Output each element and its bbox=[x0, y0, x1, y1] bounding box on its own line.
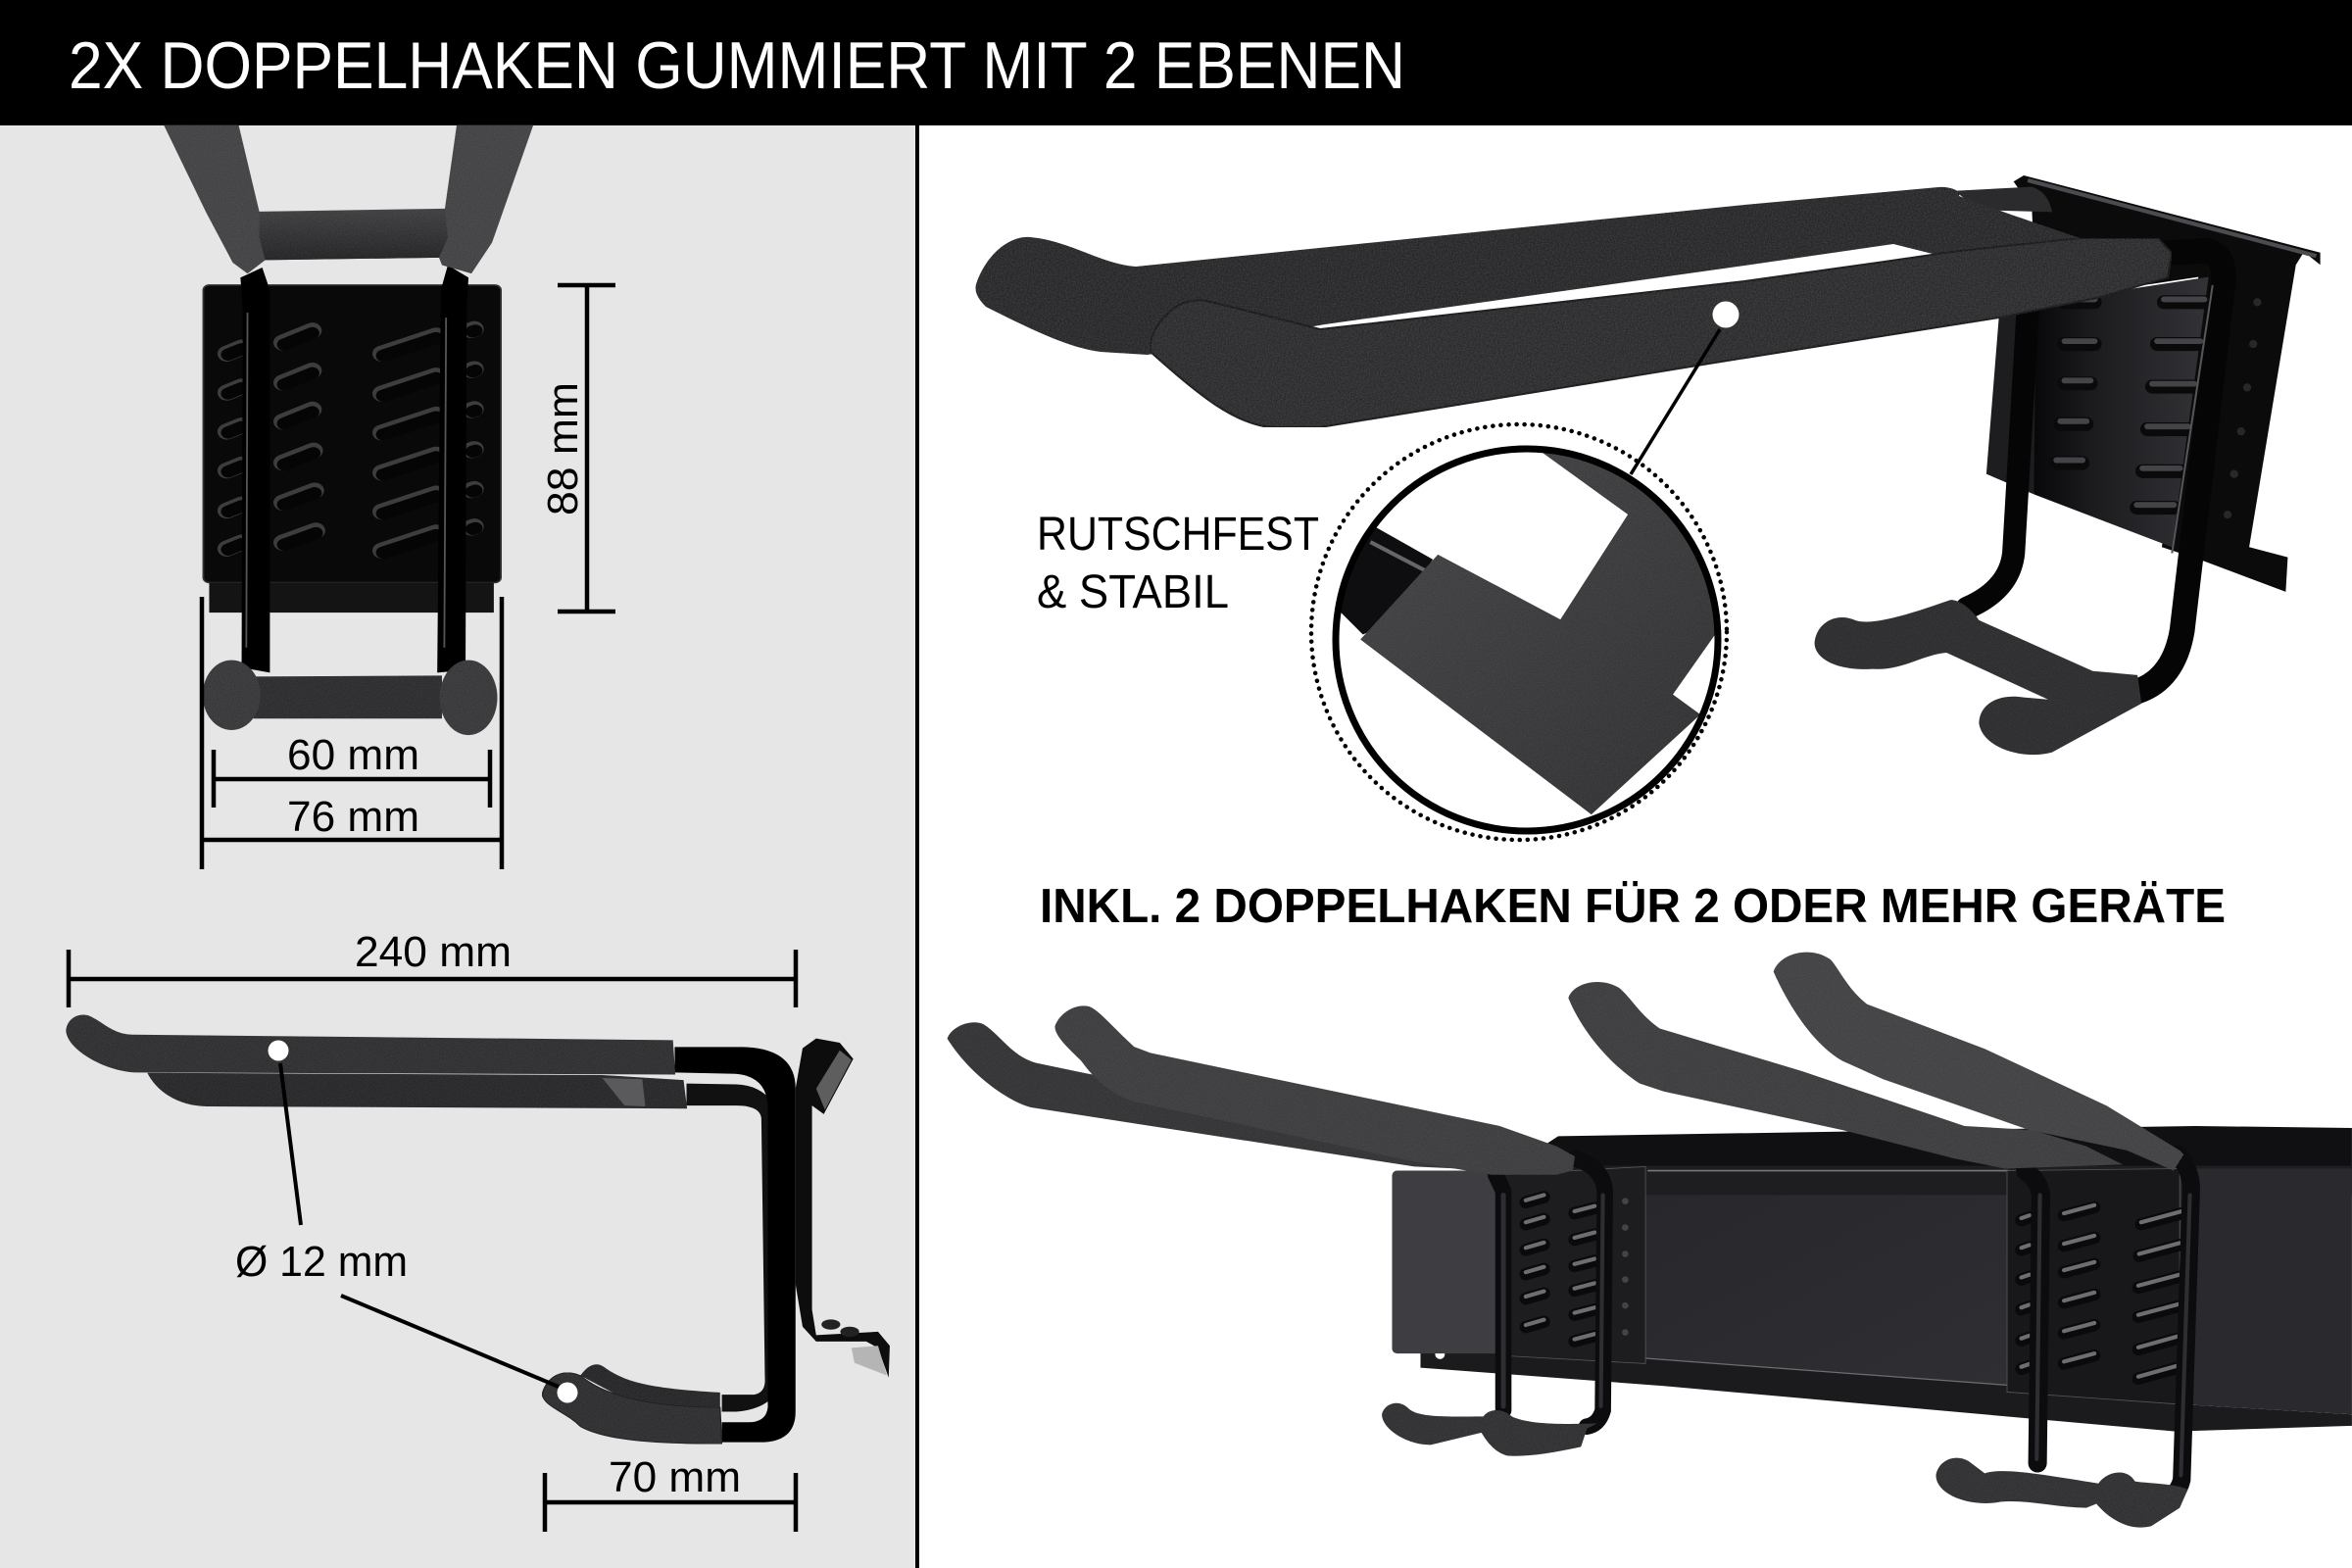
foam hook 2 bbox=[1054, 1005, 1575, 1175]
rear wire top bbox=[1955, 187, 2052, 212]
callout: diameter 12 mm bbox=[235, 1041, 578, 1403]
product image: hook side view bbox=[66, 1014, 890, 1444]
wires bbox=[240, 268, 270, 672]
label: non-slip and stable: RUTSCHFEST bbox=[1037, 509, 1319, 561]
wall plate and hardware bbox=[1955, 175, 2321, 691]
wall plate with clips bbox=[796, 1039, 890, 1378]
title: 2X DOPPELHAKEN GUMMIERT MIT 2 EBENEN bbox=[69, 28, 1405, 103]
label: non-slip and stable: & STABIL bbox=[1037, 566, 1229, 618]
marker dot lower bbox=[557, 1382, 578, 1403]
white marker dot bbox=[1713, 302, 1739, 327]
wires bbox=[1495, 1154, 2191, 1495]
foam upper V bbox=[164, 125, 533, 273]
rail top lip bbox=[1518, 1126, 2352, 1179]
marker dot upper bbox=[269, 1041, 288, 1060]
rear pair of foam hooks and foot bbox=[948, 1005, 1597, 1456]
lower foam bbox=[147, 1073, 687, 1108]
flange dots bbox=[2224, 298, 2262, 518]
plate slots bbox=[227, 329, 475, 553]
right pair of foam hooks and foot bbox=[1568, 953, 2187, 1528]
plate left wing bbox=[1986, 308, 2040, 494]
solid ring bbox=[1336, 449, 1718, 831]
label: 76 mm: 76 mm bbox=[287, 793, 419, 841]
foam lower bar and knobs bbox=[203, 661, 497, 735]
rail dots bbox=[1622, 1198, 1629, 1336]
back plate bbox=[203, 285, 501, 582]
label: 70 mm: 70 mm bbox=[609, 1453, 741, 1501]
product image: hook perspective view bbox=[975, 175, 2321, 755]
heading: included hooks: INKL. 2 DOPPELHAKEN FÜR 2 ODER MEHR GERÄTE bbox=[1040, 880, 2226, 933]
lower plate flange bbox=[209, 582, 494, 612]
crossbar shading bbox=[260, 210, 448, 260]
mount hole bbox=[1435, 1349, 1445, 1359]
left end box bbox=[1392, 1171, 1501, 1353]
foam hook 4 bbox=[1774, 953, 2183, 1171]
rail lower flange bbox=[1420, 1344, 2352, 1432]
label: 240 mm: 240 mm bbox=[355, 928, 512, 976]
dimension: 240 mm bbox=[69, 928, 796, 1007]
dimension: 60 mm bbox=[214, 731, 490, 808]
center panel bbox=[1645, 1195, 2007, 1385]
panel: left dimensions background bbox=[0, 125, 916, 1568]
hook plate one bbox=[1499, 1166, 1645, 1363]
upper wire bbox=[674, 1047, 796, 1443]
hook plate two bbox=[2007, 1168, 2180, 1404]
wires bbox=[1967, 251, 2224, 691]
foam foot two bbox=[1936, 1458, 2187, 1528]
plate slots bbox=[2056, 299, 2204, 508]
detail lens: foam texture bbox=[1311, 329, 1736, 840]
flange and lip bbox=[2014, 175, 2321, 592]
vertical panel divider bbox=[915, 125, 919, 1568]
lens contents bbox=[1341, 453, 1715, 815]
rail assembly bbox=[1392, 1126, 2352, 1495]
plate slots bbox=[1526, 1195, 2181, 1379]
dimension: 76 mm bbox=[202, 597, 502, 869]
dimension: 70 mm bbox=[545, 1453, 796, 1532]
product image: hooks on wall rail bbox=[948, 953, 2352, 1528]
foam hook 1 bbox=[948, 1022, 1459, 1168]
dotted ring bbox=[1311, 424, 1727, 840]
foam foot one bbox=[1382, 1403, 1597, 1456]
bottom foam front bbox=[542, 1373, 722, 1444]
pointer line bbox=[1631, 329, 1720, 474]
product image: hook front view bbox=[164, 125, 533, 735]
bottom foam rear bbox=[580, 1364, 720, 1409]
lower wire bbox=[687, 1084, 781, 1411]
label: 88 mm: 88 mm bbox=[539, 382, 587, 515]
lower foam hook bbox=[1815, 600, 2141, 755]
dimension: 88 mm bbox=[539, 285, 615, 612]
right end panel bbox=[2180, 1168, 2352, 1414]
front foam arm bbox=[1151, 238, 2172, 427]
foam hook 3 bbox=[1568, 982, 2123, 1168]
label: 60 mm: 60 mm bbox=[287, 731, 419, 779]
upper foam bbox=[66, 1014, 675, 1075]
rear foam arm bbox=[975, 187, 2081, 355]
title bar bbox=[0, 0, 2352, 125]
rail upper strip bbox=[1499, 1166, 2352, 1196]
plate face bbox=[2034, 277, 2209, 547]
label: diameter: Ø 12 mm bbox=[235, 1238, 408, 1286]
label: non-slip and stable bbox=[1037, 509, 1319, 618]
